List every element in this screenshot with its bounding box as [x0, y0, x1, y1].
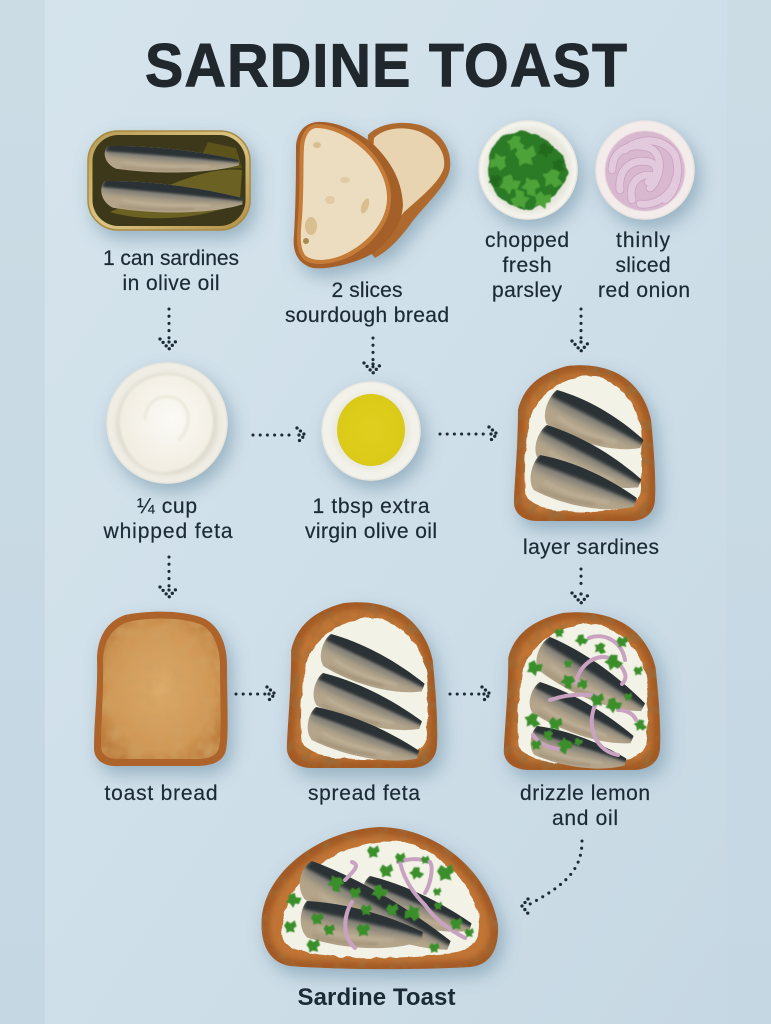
label: sourdough: sourdough bread [285, 304, 449, 327]
icon: parsley bowl [479, 121, 577, 219]
arrow: herbs to sardines [572, 309, 590, 351]
arrow: toast to spread [236, 687, 275, 702]
icon: whipped feta bowl [107, 363, 227, 483]
label: parsley: fresh [502, 254, 552, 277]
icon: sourdough slices [294, 122, 450, 268]
label: sourdough: 2 slices [332, 279, 402, 302]
label: oil: virgin olive oil [305, 520, 437, 543]
icon: finished sardine toast [262, 827, 498, 975]
icon: sardine can [88, 131, 250, 230]
arrow: sardines to drizzle [572, 569, 590, 603]
label: feta: whipped feta [102, 520, 233, 543]
arrow: oil to sardines [440, 427, 497, 442]
icon: toast with lemon, oil, herbs and onion [504, 612, 660, 786]
label: onion: thinly [616, 229, 670, 252]
icon: toast with feta and sardines [287, 602, 437, 781]
icon: red onion bowl [596, 121, 694, 219]
arrow: feta to oil [253, 428, 305, 443]
label: toast bread: toast bread [104, 782, 218, 805]
label: onion: sliced [616, 254, 670, 277]
label: drizzle lemon and oil: drizzle lemon [520, 782, 650, 805]
label: oil: 1 tbsp extra [312, 495, 430, 518]
label: final: Sardine Toast [298, 984, 456, 1011]
label: spread feta: spread feta [308, 782, 420, 805]
icon: toast with sardines layer [514, 365, 655, 531]
label: can: 1 can sardines [103, 247, 239, 270]
icon: plain toast [94, 612, 228, 766]
arrow: feta to toast [160, 557, 178, 597]
arrow: can to feta [160, 309, 178, 349]
label: layer sardines: layer sardines [523, 536, 659, 559]
label: feta: ¼ cup [137, 495, 197, 518]
icon: olive oil bowl [322, 382, 420, 480]
title: SARDINE TOAST [145, 31, 627, 100]
label: parsley: chopped [485, 229, 569, 252]
label: can: in olive oil [122, 272, 220, 295]
label: onion: red onion [598, 279, 690, 302]
label: drizzle lemon and oil: and oil [552, 807, 618, 830]
arrow: curved to final toast [522, 841, 582, 916]
arrow: spread to drizzle [450, 687, 490, 702]
arrow: bread to oil [364, 338, 382, 373]
label: parsley: parsley [492, 279, 562, 302]
